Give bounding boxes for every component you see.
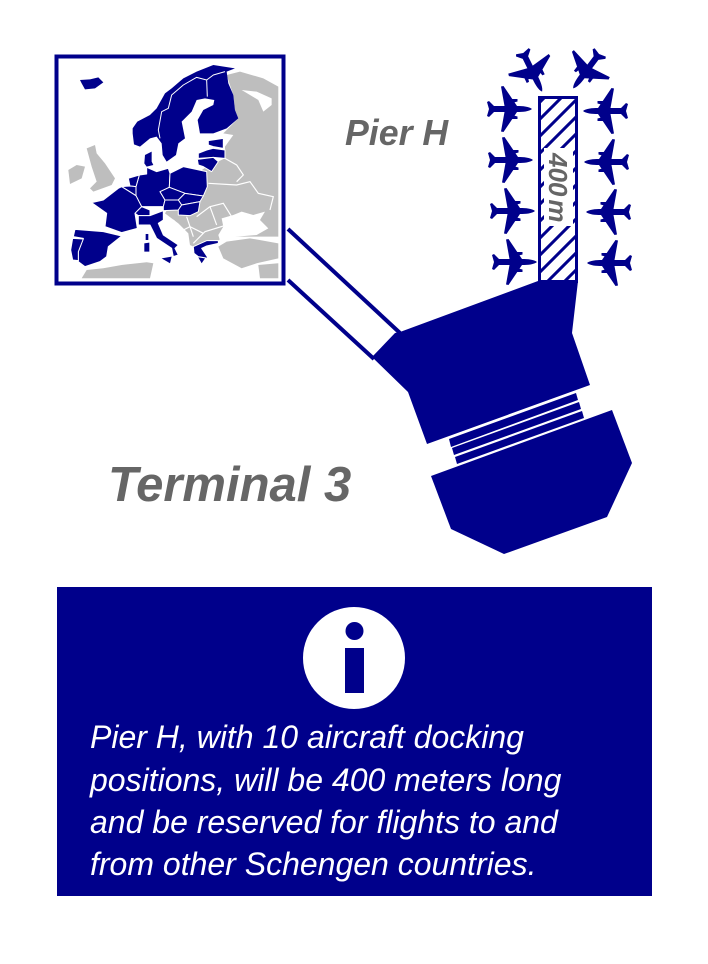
heading: Terminal 3: Terminal 3 <box>108 458 351 512</box>
map land and countries <box>68 65 278 278</box>
lower building <box>431 410 632 554</box>
heading: Pier H: Pier H <box>345 113 449 153</box>
aircraft at docking positions <box>487 39 632 286</box>
map frame <box>56 56 284 284</box>
member countries <box>71 65 238 267</box>
connecting strips <box>449 393 578 447</box>
top aircraft <box>502 39 619 102</box>
info text: and be reserved for flights to and <box>90 804 559 840</box>
left aircraft <box>487 86 537 285</box>
white seas and borders <box>218 90 272 241</box>
upper building <box>372 281 590 444</box>
non-member land <box>68 72 278 278</box>
connector lines from map to terminal <box>288 229 400 359</box>
terminal building <box>372 281 632 554</box>
right aircraft <box>583 88 632 286</box>
map of Schengen countries in Europe <box>56 56 284 284</box>
info text: positions, will be 400 meters long <box>89 762 562 798</box>
info text: from other Schengen countries. <box>90 846 536 882</box>
label: 400m: 400 m <box>543 152 573 223</box>
info panel <box>57 587 652 896</box>
pier H hatched rectangle <box>540 98 576 282</box>
info text: Pier H, with 10 aircraft docking <box>90 719 524 755</box>
panel background <box>57 587 652 896</box>
icon: information <box>303 607 405 709</box>
